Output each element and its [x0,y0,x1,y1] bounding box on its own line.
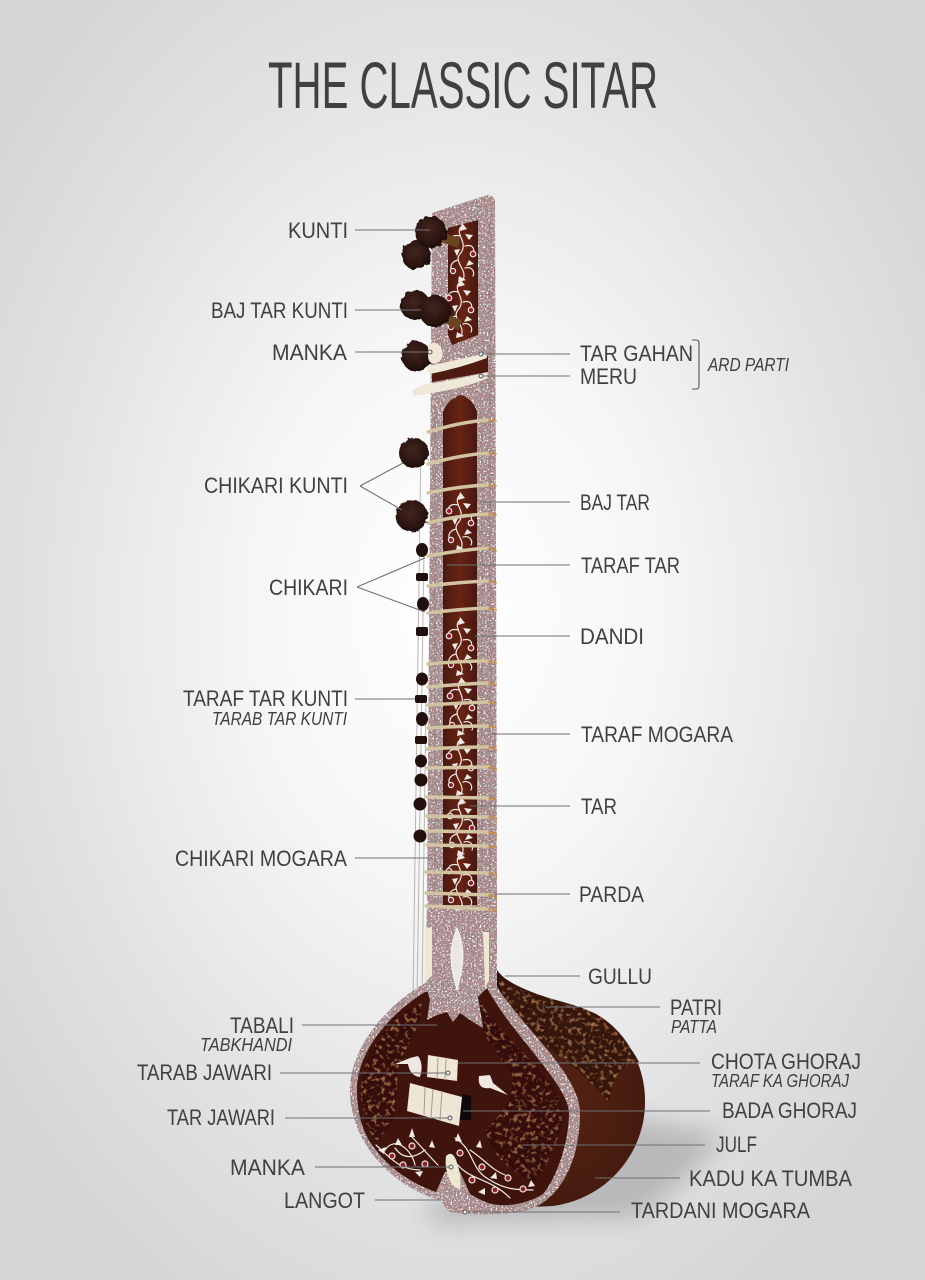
right labels: TARDANI MOGARA [631,1198,810,1223]
right labels: MERU [580,364,637,389]
neck [427,195,497,910]
left labels: TAR JAWARI [167,1105,275,1130]
right labels: ARD PARTI [707,355,789,375]
kadu ka tumba gourd [470,970,645,1210]
ard parti bracket [692,340,699,389]
right labels: TARAF MOGARA [581,722,733,747]
sitar instrument [350,195,725,1224]
right labels: GULLU [588,964,652,989]
left labels: TARAB TAR KUNTI [212,709,347,729]
tar jawari bridge [407,1083,462,1126]
right labels: TARAF TAR [581,553,680,578]
neck inlay vines [446,223,476,911]
tuning pegs small [414,543,429,842]
floor shadow [420,1110,725,1224]
right labels: PATTA [671,1017,717,1037]
right labels: BADA GHORAJ [722,1098,857,1123]
right carving [480,1000,563,1182]
cream side strips [425,928,489,988]
leader dots [428,350,483,1214]
right labels: BAJ TAR [580,490,650,515]
right labels: TAR [581,794,617,819]
right labels: DANDI [580,624,644,649]
manka beads [428,343,442,363]
left labels [137,218,365,1213]
tuning pegs large [396,216,462,532]
bada ghoraj shadow [460,1094,471,1120]
flower inlays [395,1056,508,1095]
bottom floral inlay [376,1128,535,1198]
left labels: TARAB JAWARI [137,1060,272,1085]
left labels: CHIKARI KUNTI [204,473,348,498]
front plate border [350,965,580,1214]
right labels: KADU KA TUMBA [689,1166,852,1191]
left labels: BAJ TAR KUNTI [211,298,348,323]
left labels: LANGOT [284,1188,365,1213]
frets [426,420,488,909]
tar gahan bone [427,353,487,374]
left labels: CHIKARI MOGARA [175,846,347,871]
left labels: TABALI [230,1013,294,1038]
left carving [361,1003,422,1142]
plaque inlay [451,928,463,990]
tarab jawari bridge [427,1055,458,1081]
jawari strings [424,1058,446,1120]
left labels: KUNTI [288,218,348,243]
right labels: PARDA [579,882,644,907]
neck base plaque [425,905,497,1028]
left labels: TABKHANDI [200,1035,292,1055]
left labels: MANKA [230,1155,305,1180]
left labels: CHIKARI [269,575,348,600]
meru bone [412,372,488,396]
right labels: PATRI [670,995,722,1020]
manka bone [446,1154,460,1190]
long wood panel [443,395,477,905]
right labels: JULF [716,1132,757,1157]
front plate wood [357,988,569,1205]
top wood panel [448,220,478,345]
title: THE CLASSIC SITAR [268,48,658,122]
neck column lines [435,215,490,905]
right labels: TAR GAHAN [580,341,693,366]
fret ties [488,420,497,911]
nut section wood [432,356,488,382]
left labels: TARAF TAR KUNTI [183,686,348,711]
patri carved band [498,977,639,1102]
leader lines [280,230,710,1212]
chikari strings [413,440,426,1070]
right labels [579,341,861,1223]
right labels: TARAF KA GHORAJ [711,1071,850,1091]
left labels: MANKA [272,340,347,365]
right labels: CHOTA GHORAJ [711,1049,861,1074]
